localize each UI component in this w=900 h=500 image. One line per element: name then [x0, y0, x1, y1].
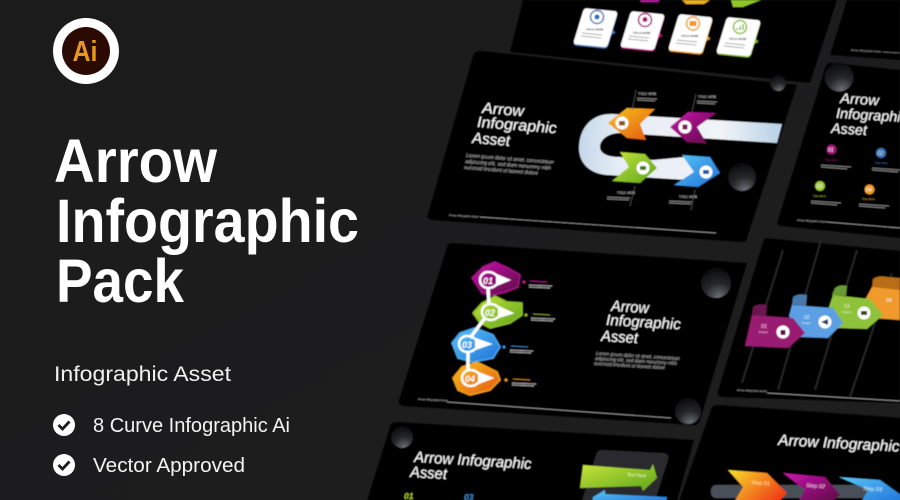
step 03 blue	[452, 328, 500, 362]
arrow block: orange	[608, 108, 655, 140]
slide heading: Asset	[600, 328, 639, 347]
card: green	[716, 17, 765, 58]
slide heading: Infographic	[606, 312, 681, 334]
step 02	[783, 473, 840, 500]
slide heading	[830, 91, 900, 139]
point 02: 02	[878, 151, 883, 157]
card: blue	[573, 8, 622, 49]
ribbon 02 blue	[789, 294, 843, 338]
slide body text: euismod tincidunt ut laoreet dolore	[464, 165, 538, 177]
slide footer	[737, 388, 900, 401]
vertical streaks	[742, 240, 892, 397]
step 02: Step 02	[806, 483, 825, 490]
slide footer	[797, 218, 900, 228]
title	[54, 127, 359, 315]
feature: vector approved: Vector Approved	[93, 455, 245, 477]
grey backing card	[581, 450, 668, 500]
arrow callouts	[607, 90, 717, 210]
arrow callouts: TITLE HERE	[638, 92, 656, 96]
point 01: Title Here	[825, 158, 838, 162]
panel: horizontal arrows list slide	[366, 422, 694, 500]
green arrow	[580, 464, 657, 491]
sphere bottom	[675, 398, 701, 424]
slide body text: adipiscing elit, sed diam nonummy nibh	[465, 159, 551, 172]
ribbon 01 magenta	[745, 304, 805, 348]
step numbers: 02	[485, 308, 495, 318]
slide body text: Lorem ipsum dolor sit amet, consectetuer	[466, 153, 554, 166]
list numbers	[404, 491, 474, 500]
slide heading: Arrow	[839, 91, 881, 109]
slide footer	[449, 213, 716, 233]
panel: step arrows slide	[678, 405, 900, 500]
slide body text: adipiscing elit, sed diam nonummy nibh	[595, 356, 677, 367]
slide body text: Lorem ipsum dolor sit amet, consectetuer	[596, 351, 680, 362]
slide footer: Arrow Infographic Asset	[418, 397, 448, 403]
sphere small	[770, 75, 786, 91]
card captions: TITLE HERE	[633, 31, 651, 35]
arrow callouts: TITLE HERE	[617, 191, 635, 195]
ribbon 01 magenta: Project	[759, 330, 768, 334]
arrow block: magenta	[670, 112, 716, 144]
slide footer	[418, 397, 671, 418]
slide footer: Arrow Infographic Asset	[797, 218, 827, 224]
arrow callouts: TITLE HERE	[698, 95, 716, 99]
point 02: Title Here	[875, 161, 888, 165]
sphere	[391, 426, 413, 448]
sphere large	[728, 163, 756, 191]
point 04: 04	[866, 188, 872, 194]
step numbers: 04	[465, 374, 475, 384]
connector bar	[711, 485, 886, 498]
step numbers: 01	[483, 276, 493, 286]
slide body text: euismod tincidunt ut laoreet dolore	[594, 361, 665, 371]
sphere	[824, 62, 854, 92]
card captions: TITLE HERE	[586, 28, 604, 32]
card: magenta	[620, 11, 669, 52]
arrow block: green	[612, 152, 657, 183]
slide body text	[594, 351, 680, 371]
arrow block: blue	[674, 155, 720, 187]
point 02	[872, 148, 900, 172]
ribbon 03 green: Project	[842, 310, 851, 314]
slide heading: Arrow	[610, 298, 650, 317]
slide footer: Arrow Infographic Asset	[737, 388, 767, 393]
step 03: Step 03	[863, 486, 883, 493]
slide heading	[409, 449, 532, 483]
logo: Adobe Illustrator badge: Ai	[72, 36, 98, 68]
title: Pack	[56, 247, 184, 315]
ribbon 04 orange: 04	[886, 298, 892, 304]
green arrow: Text Here	[627, 472, 647, 478]
slide heading: Infographic	[477, 114, 557, 137]
point 04	[859, 184, 889, 208]
slide heading: Asset	[471, 130, 511, 150]
subtitle: Infographic Asset	[54, 363, 231, 386]
step numbers	[462, 276, 495, 384]
arrow callouts: TITLE HERE	[679, 195, 697, 199]
panel: U-turn arrow slide	[428, 51, 797, 242]
ribbon 03 green	[829, 285, 883, 329]
point 01: 01	[828, 148, 834, 154]
card captions: TITLE HERE	[681, 34, 699, 38]
point 04: Title Here	[862, 197, 875, 201]
panel: vertical stacked arrows slide	[399, 243, 747, 425]
card captions: TITLE HERE	[729, 37, 747, 41]
title: Infographic	[56, 187, 359, 255]
point 03: 03	[816, 184, 822, 190]
card captions	[586, 28, 747, 41]
panel: four points slide	[777, 62, 900, 238]
step 01: Step 01	[751, 480, 770, 487]
ribbon 02 blue: 02	[804, 315, 810, 321]
point 03	[811, 181, 841, 205]
slide heading: Arrow	[481, 100, 525, 120]
slide heading: Asset	[830, 121, 868, 139]
ribbon 03 green: 03	[844, 304, 850, 310]
slide footer: Arrow Infographic Asset	[449, 213, 479, 219]
ribbon 04 orange	[866, 276, 900, 320]
step 04 orange	[453, 362, 500, 395]
panel: top right slide: Arrow Infographic Asset	[851, 48, 881, 54]
U-turn arrow band	[579, 114, 782, 180]
step 02 green	[473, 296, 522, 328]
slide heading: Asset	[409, 464, 448, 483]
card: orange	[668, 14, 717, 55]
panel: ribbon arrows slide	[718, 238, 900, 403]
step 01	[728, 470, 787, 500]
slide heading: Arrow Infographic	[413, 449, 532, 473]
sphere top	[701, 268, 731, 298]
ribbon 01 magenta: 01	[761, 324, 767, 330]
slide body text	[464, 153, 554, 177]
point 01	[821, 144, 851, 169]
step connector	[468, 288, 489, 370]
step labels	[502, 280, 555, 386]
title: Arrow	[54, 127, 218, 195]
slide heading: Arrow Infographic	[777, 432, 900, 456]
step numbers: 03	[462, 340, 472, 350]
blue arrow	[592, 490, 667, 500]
logo: Adobe Illustrator badge	[53, 18, 119, 84]
panel: top icon cards	[510, 0, 837, 83]
step pins	[459, 272, 511, 386]
ribbon 02 blue: Project	[802, 321, 811, 325]
panel: top right slide	[830, 0, 900, 60]
slide heading	[471, 100, 557, 150]
slide heading	[600, 298, 681, 347]
point 03: Title Here	[813, 194, 826, 198]
feature: 8 curve infographic: 8 Curve Infographic Ai	[93, 415, 290, 437]
step 01 magenta	[472, 262, 520, 295]
step 03	[839, 477, 900, 500]
